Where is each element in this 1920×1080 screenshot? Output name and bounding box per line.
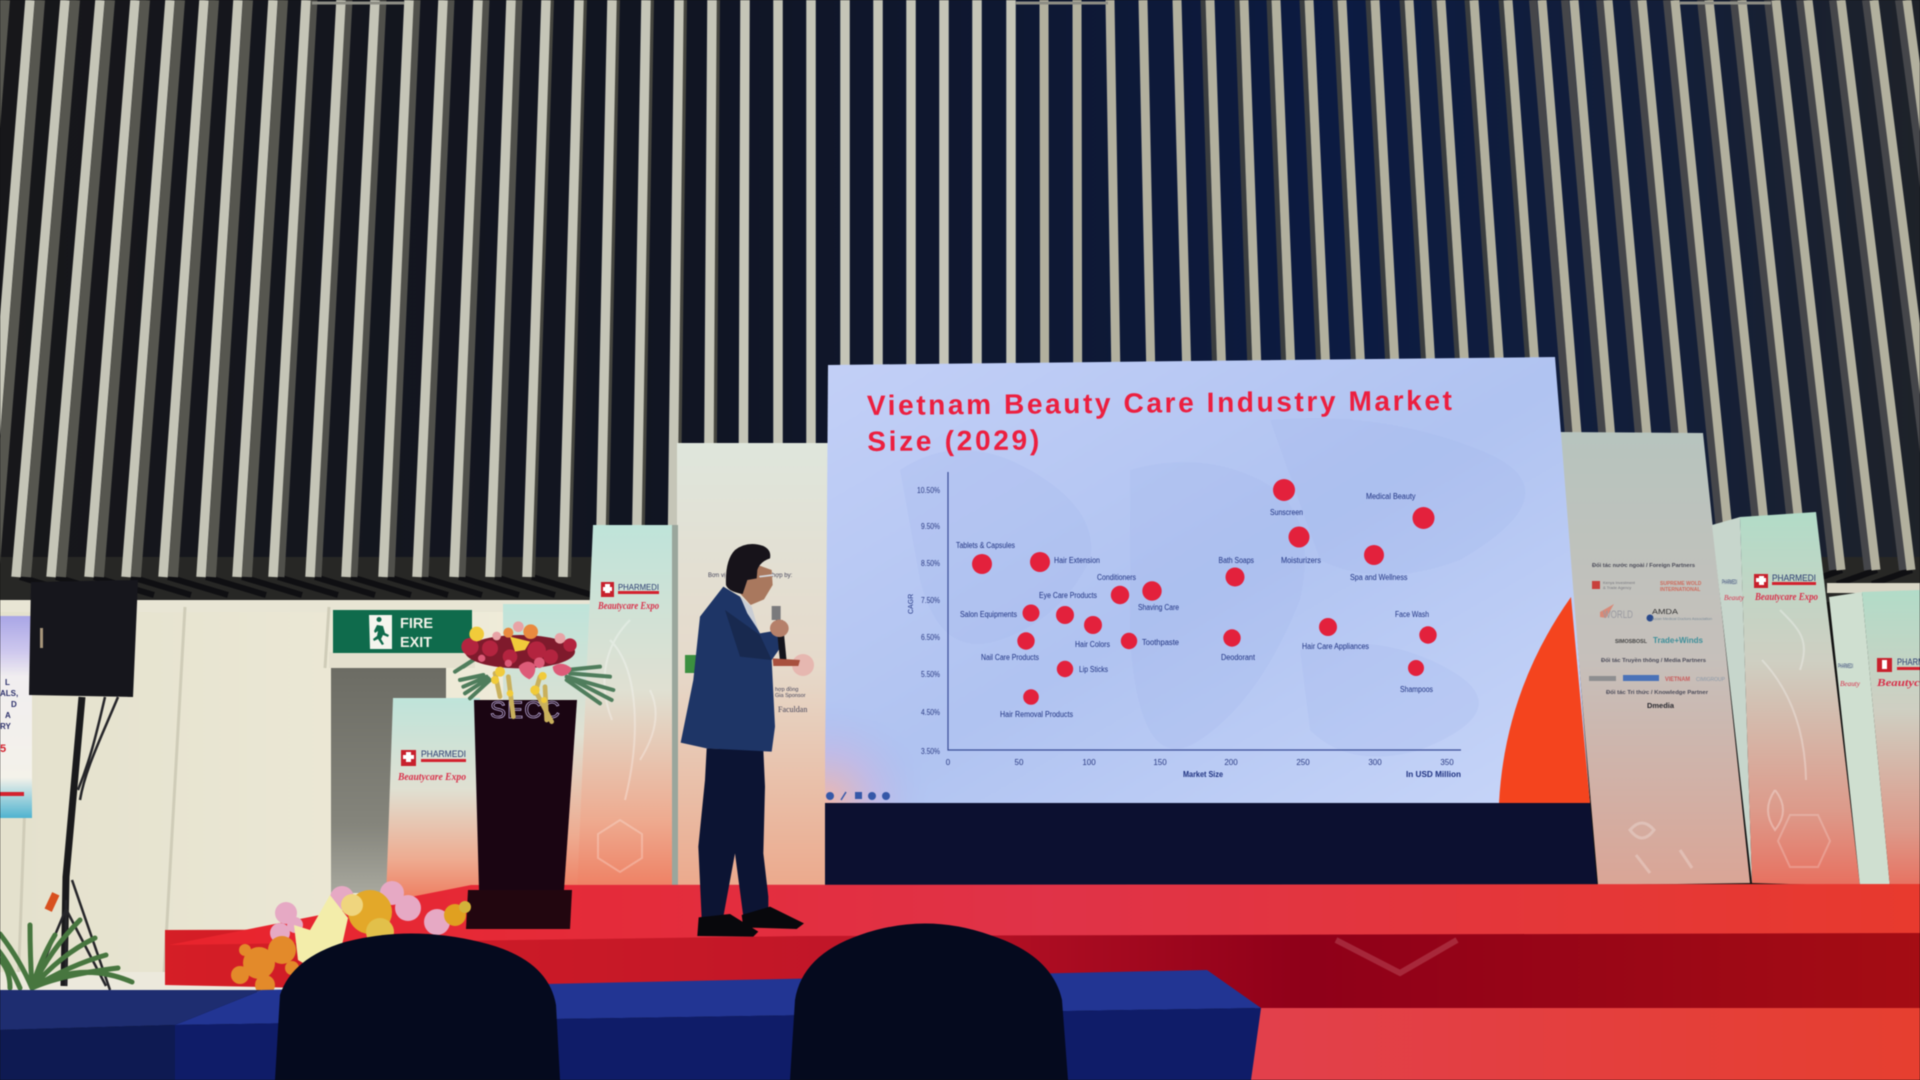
panels right of screen (1559, 432, 1920, 889)
fire exit sign: FIRE (400, 615, 433, 632)
potted plant bottom left (0, 920, 132, 988)
panel: tall organiser board: hợp by: (772, 573, 793, 579)
panel: partner board: SIMOSBOSL (1615, 639, 1647, 645)
data labels: Deodorant (1221, 653, 1256, 662)
panel: partner board: Đối tác Tri thức / Knowledge Partner (1606, 689, 1709, 696)
slide background (825, 357, 1590, 803)
side banner at left edge: RY (0, 722, 11, 731)
fire exit sign: EXIT (400, 634, 432, 651)
panel: tall organiser board: Gia Sponsor (775, 693, 806, 699)
panel: right pillar (1712, 512, 1860, 886)
x axis labels: 300 (1368, 758, 1382, 767)
slideshow toolbar icons (826, 792, 890, 800)
panel: right pillar: PHARMEDI (1772, 573, 1816, 583)
carpet crease on riser (1336, 940, 1457, 973)
lower flower bouquet (231, 881, 471, 995)
data labels: Medical Beauty (1366, 492, 1416, 501)
y axis labels: 4.50% (921, 707, 940, 717)
panel: small pillar (386, 698, 480, 900)
podium (466, 697, 577, 929)
x axis labels: 0 (946, 758, 951, 767)
y axis labels: 9.50% (921, 521, 940, 531)
centre table (175, 970, 1261, 1025)
panel: partner board: & Trade Agency (1603, 585, 1631, 590)
panel: partner board (1559, 432, 1750, 885)
axis titles: In USD Million (1406, 770, 1461, 779)
data labels: Shaving Care (1138, 603, 1179, 612)
speaker person (681, 544, 804, 937)
stage riser (165, 925, 1920, 1008)
data labels: Lip Sticks (1079, 665, 1108, 674)
peach glow bottom-left (825, 700, 930, 803)
data labels: Bath Soaps (1218, 556, 1254, 565)
back panels behind stage left (386, 443, 828, 900)
icon: running man exit (369, 615, 392, 649)
panel: partner board: INTERNATIONAL (1660, 587, 1700, 593)
y axis labels (917, 485, 940, 756)
panel: tall organiser board: hợp đồng (775, 687, 798, 693)
data labels: Salon Equipments (960, 610, 1017, 619)
shoes (697, 907, 804, 937)
logo: Pharmedi on small pillar: Beautycare Expo (397, 771, 466, 783)
x axis labels: 150 (1153, 758, 1167, 767)
axes (948, 472, 1461, 750)
panel: partner board: Trade+Winds (1653, 636, 1704, 645)
title (867, 385, 1452, 457)
panel: far right pillar: Beauty (1840, 680, 1861, 688)
data labels: Conditioners (1097, 573, 1136, 582)
panel: partner board: SUPREME WOLD (1660, 581, 1702, 587)
doorway (331, 668, 446, 893)
data labels: Hair Extension (1054, 556, 1100, 565)
panel: right pillar: Beautycare Expo (1754, 591, 1818, 603)
panel: right pillar: Beauty (1724, 594, 1745, 602)
panel: tall organiser board (677, 443, 828, 888)
stage (165, 884, 1920, 1080)
second hand (773, 658, 800, 666)
side banner at left edge: 5 (0, 743, 6, 755)
side banner at left edge: D (11, 700, 17, 709)
panel: partner board: CIMIGROUP (1696, 677, 1725, 683)
side banner at left edge: L (5, 678, 10, 687)
hanging orchids (495, 673, 552, 722)
panel: partner board: Asian Medical Doctors Association (1652, 617, 1712, 621)
x axis labels: 200 (1224, 758, 1238, 767)
neck and face (740, 563, 773, 605)
sleeve shadow (725, 610, 772, 660)
y axis labels: 10.50% (917, 485, 940, 495)
data labels: Face Wash (1395, 610, 1429, 619)
data labels: Spa and Wellness (1350, 573, 1408, 582)
jacket (681, 587, 783, 752)
y axis labels: 5.50% (921, 669, 940, 679)
data labels (956, 492, 1433, 719)
data labels: Toothpaste (1142, 638, 1180, 647)
title: Vietnam Beauty Care Industry Market (867, 385, 1452, 421)
blue covered tables (0, 970, 1261, 1080)
hair (726, 544, 770, 594)
audience chairs (275, 924, 1068, 1080)
panel: partner board: VIETNAM (1665, 676, 1690, 683)
right chair (790, 924, 1068, 1080)
panel: far right pillar (1827, 583, 1920, 889)
logo: Pharmedi on tall pillar (597, 582, 659, 612)
side banner at left edge: ALS, (0, 689, 18, 698)
left chair (275, 934, 560, 1080)
podium: SECC (490, 697, 560, 724)
title: Size (2029) (867, 424, 1039, 457)
lower floor (1250, 1008, 1920, 1080)
y axis labels: 7.50% (921, 595, 940, 605)
panel: tall organiser board: Bơn vị (708, 573, 725, 579)
data labels: Hair Removal Products (1000, 710, 1073, 719)
data labels: Hair Care Appliances (1302, 642, 1369, 651)
trousers (698, 748, 768, 918)
y axis labels: 3.50% (921, 746, 940, 756)
logo: Pharmedi on small pillar (397, 749, 466, 783)
panel: right pillar: PHARMEDI (1722, 580, 1737, 586)
y axis labels: 6.50% (921, 632, 940, 642)
axis titles: CAGR (908, 594, 915, 614)
data labels: Eye Care Products (1039, 591, 1097, 600)
panel: partner board: Đối tác Truyền thông / Media Partners (1601, 657, 1706, 664)
data labels: Nail Care Products (981, 653, 1039, 662)
panel: tall organiser board: Faculdan (778, 705, 807, 714)
white lily (294, 895, 348, 972)
background: slatted wall (0, 0, 1920, 602)
axis titles: Market Size (1183, 770, 1223, 779)
projection screen slide (825, 357, 1590, 803)
glasses (759, 575, 773, 577)
data labels: Sunscreen (1270, 508, 1303, 517)
door header (329, 652, 475, 668)
left table (0, 990, 262, 1030)
world map watermark (900, 418, 1525, 757)
panel: tall pillar (577, 525, 672, 893)
x axis labels (946, 758, 1454, 767)
side banner at left edge (0, 616, 32, 818)
data labels: Moisturizers (1281, 556, 1321, 565)
x axis labels: 100 (1082, 758, 1096, 767)
logo: Pharmedi on tall pillar: PHARMEDI (618, 582, 659, 592)
panel: partner board: WORLD (1603, 609, 1633, 621)
panel: partner board: AMDA (1652, 609, 1678, 616)
panel: mint backdrop behind podium (503, 604, 595, 894)
logo: Pharmedi on tall pillar: Beautycare Expo (597, 601, 659, 612)
palm leaves (455, 653, 613, 703)
x axis labels: 250 (1296, 758, 1310, 767)
x axis labels: 350 (1440, 758, 1454, 767)
x axis labels: 50 (1015, 758, 1024, 767)
hand (770, 620, 789, 637)
orange corner shape (1499, 597, 1590, 803)
exhibition booth wall (0, 600, 600, 992)
data points (972, 479, 1437, 705)
panel: partner board: Kenya Investment (1603, 580, 1636, 585)
data labels: Tablets & Capsules (956, 541, 1015, 550)
shirt collar (740, 596, 758, 630)
podium flower arrangement (455, 621, 613, 722)
panel: partner board: Đối tác nước ngoài / Foreign Partners (1592, 562, 1695, 569)
microphone (772, 606, 781, 620)
red mass (465, 635, 575, 668)
screen base skirt (825, 802, 1597, 887)
loudspeaker on tripod (29, 580, 138, 990)
scatter chart (908, 472, 1461, 779)
logo: Pharmedi on small pillar: PHARMEDI (421, 749, 466, 759)
data labels: Hair Colors (1075, 640, 1110, 649)
stage top surface (169, 884, 1920, 945)
fire exit sign (333, 610, 472, 653)
data labels: Shampoos (1400, 685, 1433, 694)
panel: partner board: Dmedia (1647, 703, 1674, 710)
panel: far right pillar: PHARMEDI (1838, 664, 1853, 670)
axis titles (908, 594, 1461, 779)
side banner at left edge: A (5, 711, 11, 720)
y axis labels: 8.50% (921, 558, 940, 568)
